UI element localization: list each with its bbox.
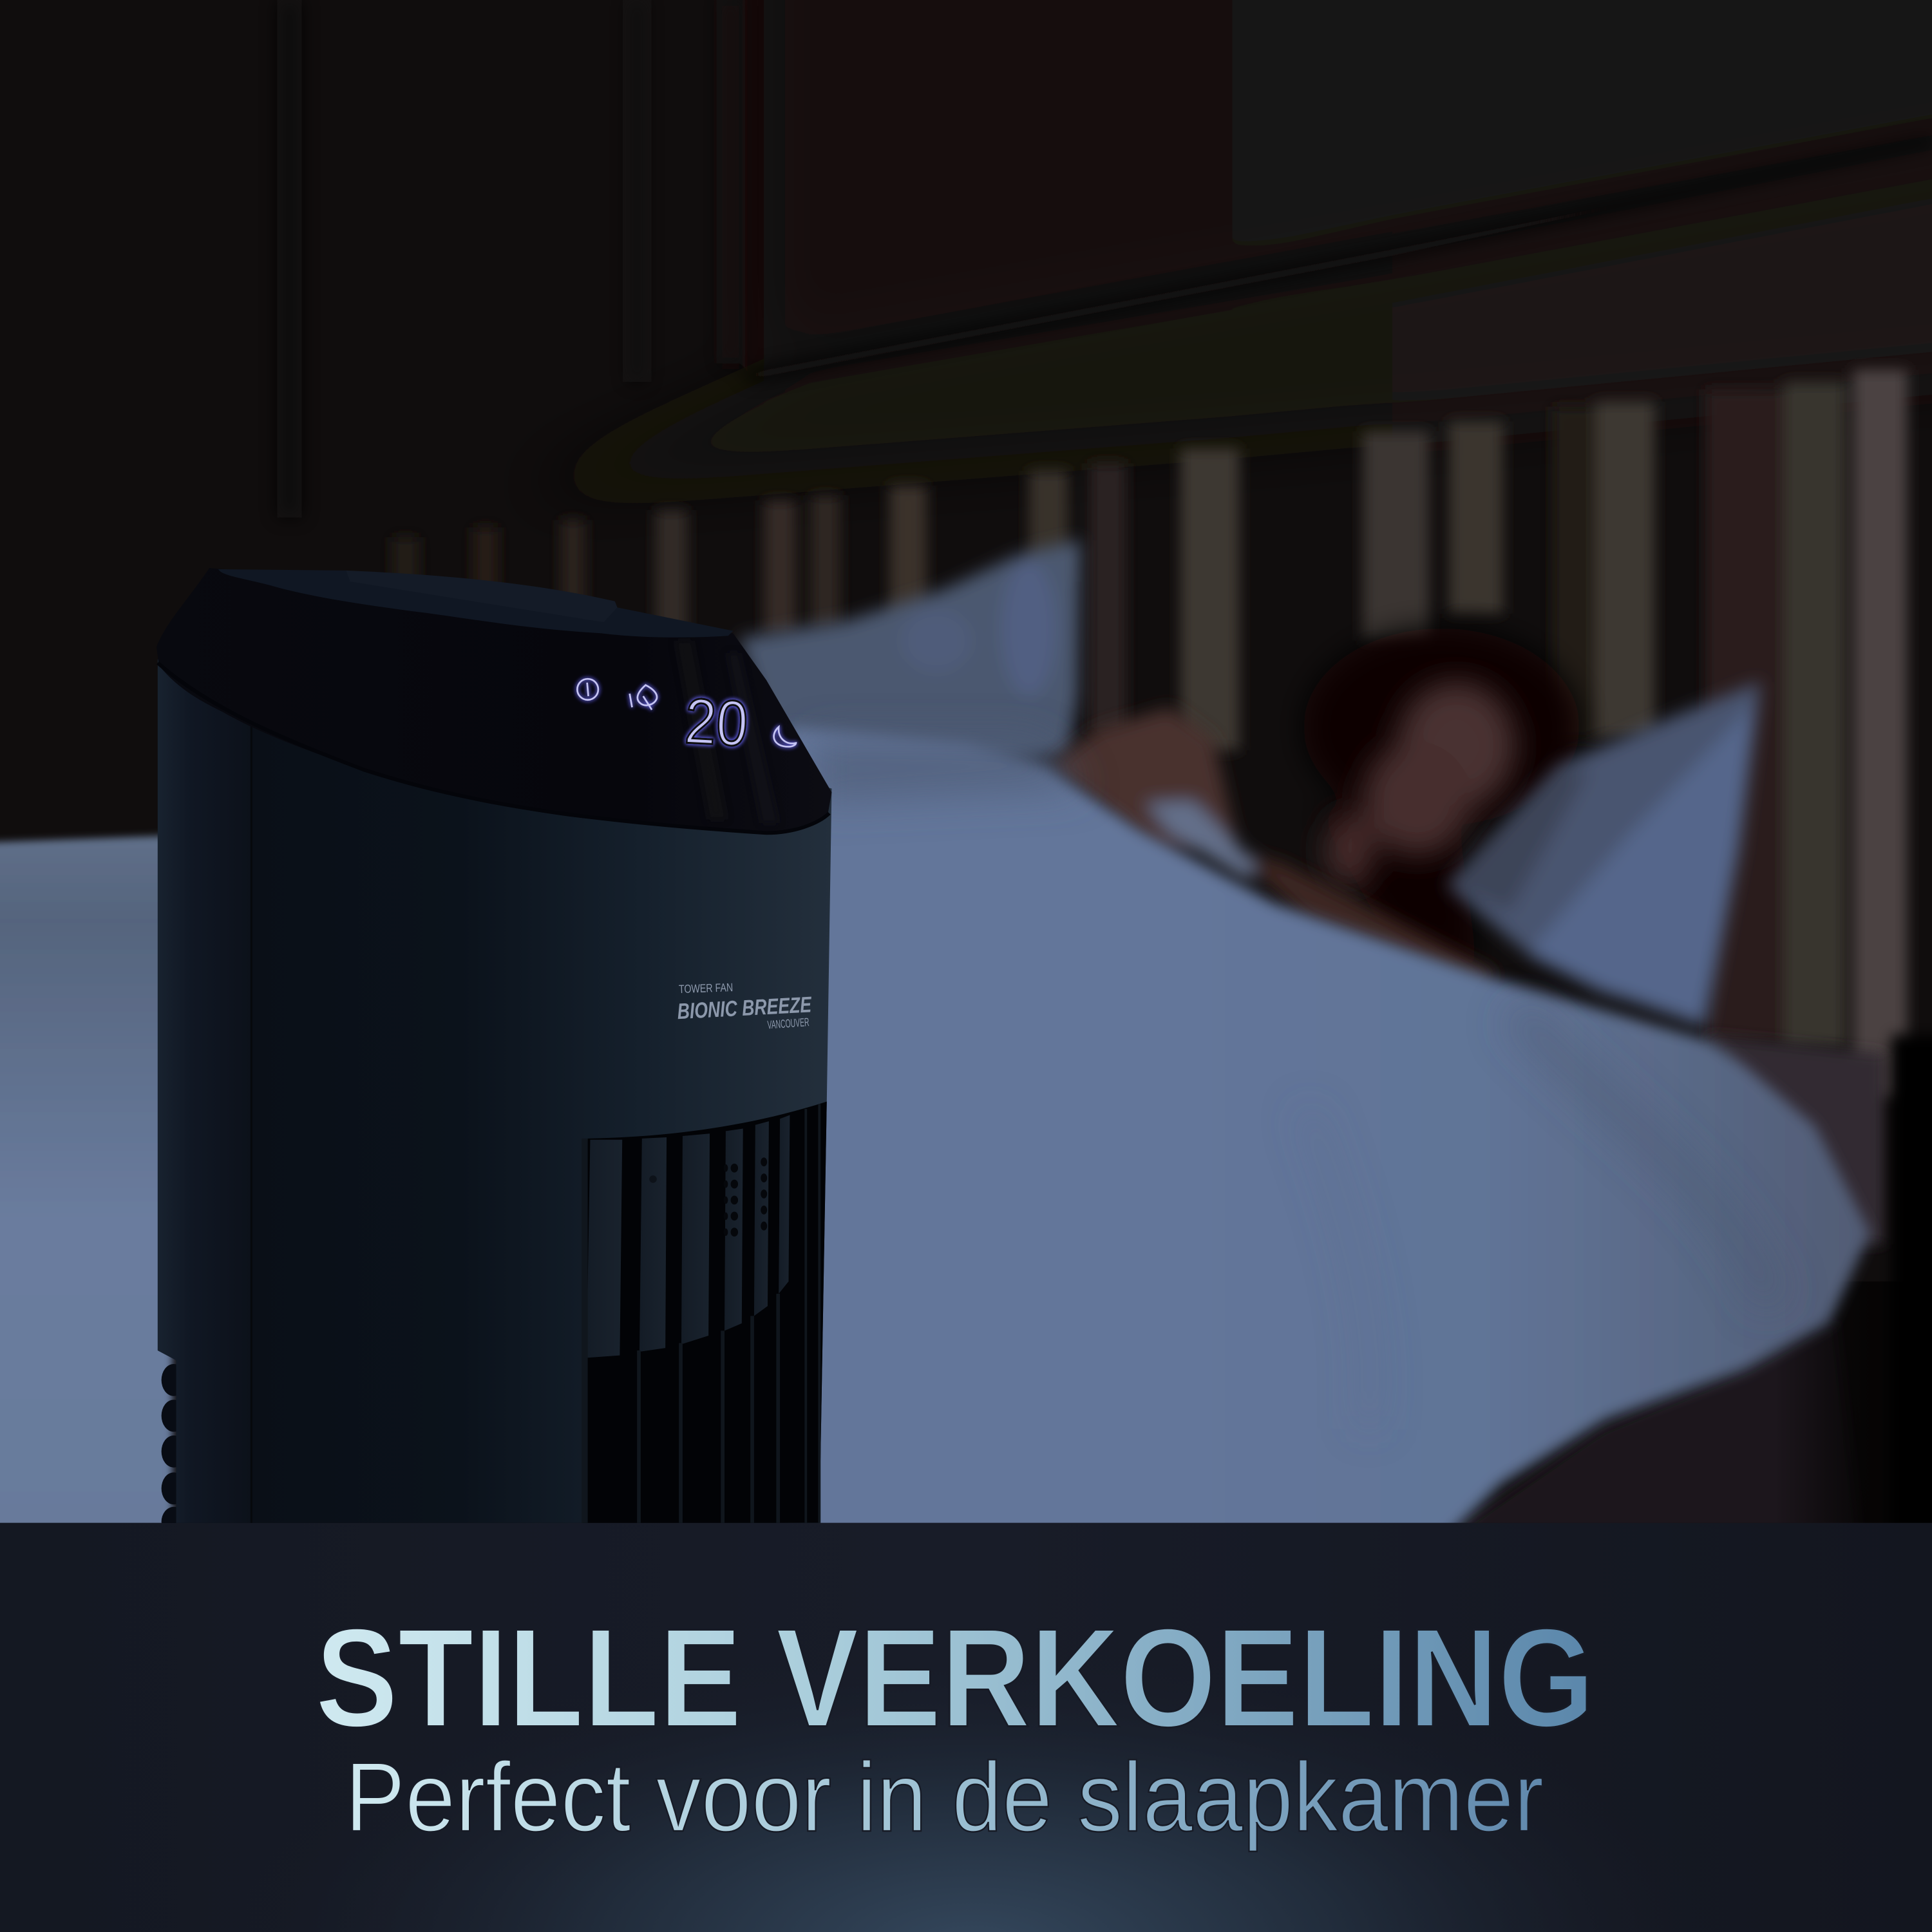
headboard slats [392,370,1908,1097]
display: temperature 20: 20 [683,685,750,760]
display icon: power [577,679,598,700]
reflections on cap [675,641,779,823]
logo: tower fan: TOWER FAN [679,981,733,996]
mattress and bed frame [1442,1035,1932,1553]
vent perforations [649,1157,767,1236]
heading: STILLE VERKOELING [316,1600,1595,1756]
hair [1303,629,1580,973]
left side of bed [0,835,173,1540]
pillow behind [739,540,1081,788]
logo: vancouver: VANCOUVER [767,1016,810,1032]
cap top disc [218,569,733,638]
fan base ribs on the left edge [162,1364,186,1537]
face [1325,681,1515,887]
logo: bionic breeze: BIONIC BREEZE [677,992,813,1024]
fan body [158,659,831,1523]
vent grille [582,1101,827,1523]
glossy control cap [156,568,831,831]
subheading: Perfect voor in de slaapkamer [345,1742,1544,1852]
arm and sleeve [1048,707,1497,986]
white duvet [788,727,1870,1540]
tower fan [156,568,831,1537]
headboard and wall backdrop [711,0,1932,452]
fan logo [677,981,813,1032]
display icon: moon [774,727,796,746]
bottom caption panel [0,1523,1932,1932]
display icon: eco leaf [630,685,657,710]
pillow front [1446,681,1761,1028]
person sleeping [1048,629,1580,986]
